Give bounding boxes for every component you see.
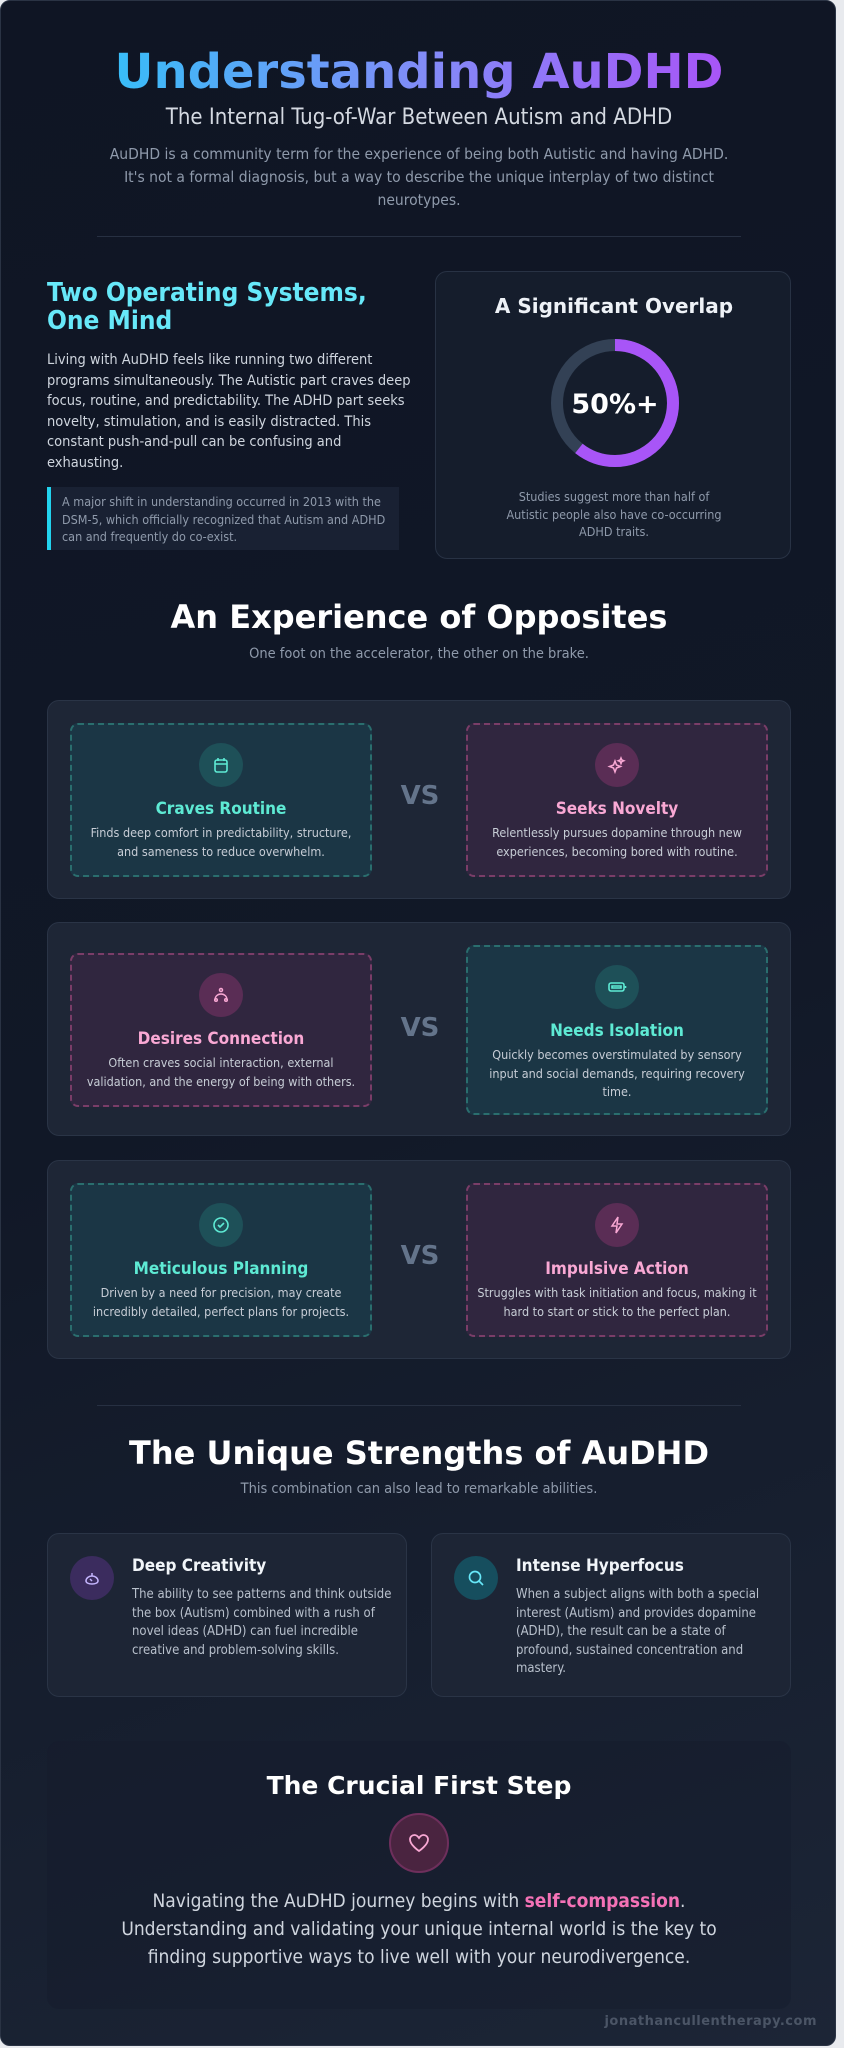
subheading: One foot on the accelerator, the other on the brake.	[249, 646, 589, 662]
icon: heart	[389, 1813, 449, 1873]
card: seeks novelty	[466, 723, 768, 877]
panel: significant overlap	[435, 271, 791, 559]
closing paragraph: Navigating the AuDHD journey begins with self-compassion. Understanding and validating your unique internal world is the key to finding supportive ways to live well with your neurodivergence.	[121, 1890, 717, 1968]
heading: unique strengths: The Unique Strengths of AuDHD	[129, 1434, 709, 1472]
card: seeks novelty: Seeks Novelty	[556, 799, 678, 819]
card: needs isolation: Needs Isolation	[550, 1021, 684, 1041]
vs: VS	[401, 1013, 439, 1043]
overlap heading: A Significant Overlap	[495, 294, 733, 318]
card: needs isolation: Quickly becomes overstimulated by sensory input and social demands, requiring recovery time.	[489, 1047, 745, 1099]
card: meticulous planning	[70, 1183, 372, 1337]
card: craves routine: Finds deep comfort in predictability, structure, and sameness to reduce overwhelm.	[91, 825, 351, 858]
title: Understanding AuDHD	[114, 44, 724, 100]
card: needs isolation	[466, 945, 768, 1115]
callout: DSM-5 note: A major shift in understanding occurred in 2013 with the DSM-5, which officially recognized that Autism and ADHD can and frequently do co-exist.	[62, 494, 385, 544]
section: two operating systems	[47, 278, 411, 470]
donut chart	[551, 339, 679, 467]
section: crucial first step	[47, 1741, 791, 2009]
card: impulsive action: Struggles with task initiation and focus, making it hard to start or stick to the perfect plan.	[477, 1285, 757, 1318]
vs: VS	[401, 1241, 439, 1271]
strength card: deep creativity: The ability to see patterns and think outside the box (Autism) combined with a rush of novel ideas (ADHD) can fuel incredible creative and problem-solving skills.	[132, 1587, 391, 1658]
strength card: deep creativity: Deep Creativity	[132, 1556, 266, 1576]
card: desires connection	[70, 953, 372, 1107]
strengths subheading: This combination can also lead to remarkable abilities.	[241, 1481, 597, 1497]
panel: routine vs novelty	[47, 700, 791, 899]
icon: magnifier	[454, 1556, 498, 1600]
card: desires connection: Desires Connection	[138, 1029, 304, 1049]
subtitle: The Internal Tug-of-War Between Autism and ADHD	[166, 105, 672, 130]
strength card: intense hyperfocus: Intense Hyperfocus	[516, 1556, 684, 1576]
card: meticulous planning: Meticulous Planning	[134, 1259, 308, 1279]
strength card: intense hyperfocus	[431, 1533, 791, 1697]
heading: Two Operating Systems, One Mind	[47, 278, 367, 336]
card: seeks novelty: Relentlessly pursues dopamine through new experiences, becoming bored with routine.	[492, 825, 742, 858]
card: craves routine	[70, 723, 372, 877]
card: impulsive action	[466, 1183, 768, 1337]
heading: experience of opposites: An Experience of Opposites	[171, 598, 667, 636]
donut chart: 50%+	[571, 389, 659, 420]
overlap caption: Studies suggest more than half of Autistic people also have co-occurring ADHD traits.	[506, 489, 722, 539]
card: craves routine: Craves Routine	[156, 799, 286, 819]
icon: brain	[70, 1556, 114, 1600]
panel: connection vs isolation	[47, 922, 791, 1136]
panel: planning vs impulsive	[47, 1160, 791, 1359]
paragraph: Living with AuDHD feels like running two different programs simultaneously. The Autistic part craves deep focus, routine, and predictability. The ADHD part seeks novelty, stimulation, and is easily distracted. This constant push-and-pull can be confusing and exhausting.	[47, 352, 411, 470]
footer url: jonathancullentherapy.com	[604, 2014, 817, 2029]
card: meticulous planning: Driven by a need for precision, may create incredibly detailed, perfect plans for projects.	[93, 1285, 349, 1318]
vs: VS	[401, 781, 439, 811]
card: desires connection: Often craves social interaction, external validation, and the energy of being with others.	[87, 1055, 355, 1088]
strength card: deep creativity	[47, 1533, 407, 1697]
card: impulsive action: Impulsive Action	[545, 1259, 689, 1279]
strength card: intense hyperfocus: When a subject aligns with both a special interest (Autism) and provides dopamine (ADHD), the result can be a state of profound, sustained concentration and mastery.	[516, 1587, 759, 1676]
heading: The Crucial First Step	[267, 1771, 571, 1800]
intro paragraph: AuDHD is a community term for the experience of being both Autistic and having ADHD. It's not a formal diagnosis, but a way to describe the unique interplay of two distinct neurotypes.	[110, 145, 728, 209]
